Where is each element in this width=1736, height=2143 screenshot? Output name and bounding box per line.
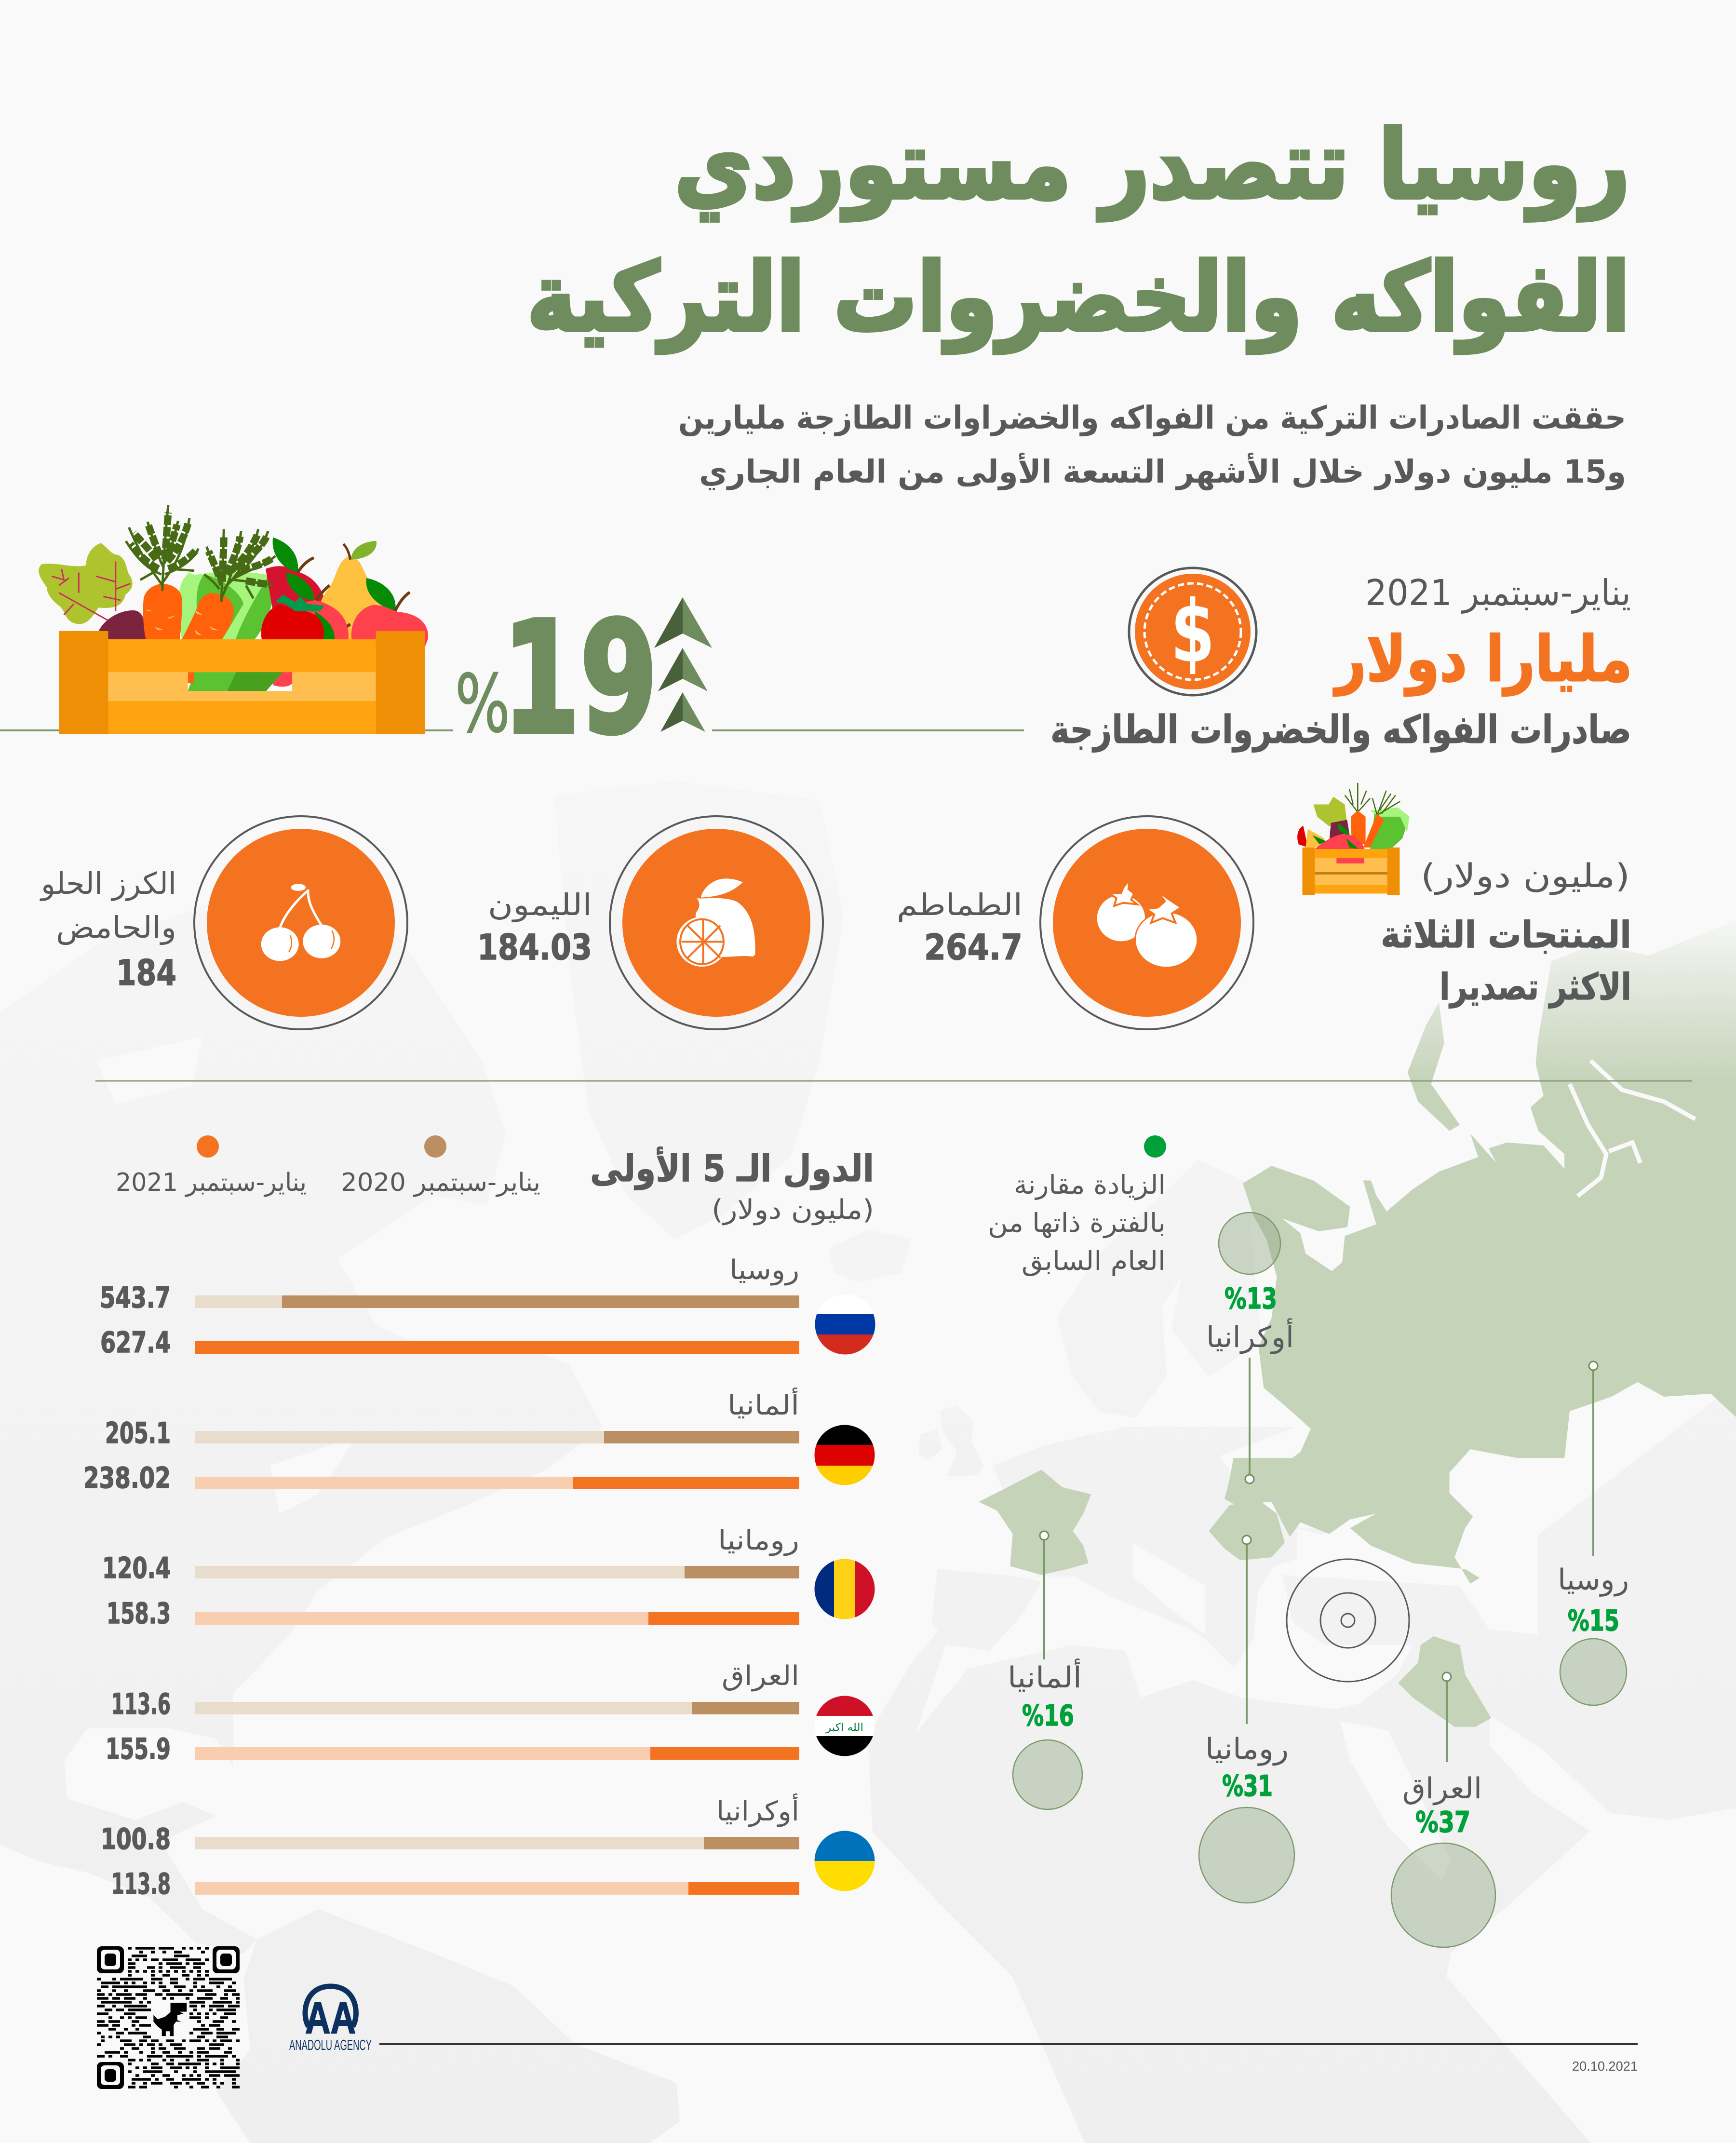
subtitle: و15 مليون دولار خلال الأشهر التسعة الأولى من العام الجاري [699,452,1626,491]
bar row: Romania: رومانيا [718,1525,799,1556]
Novaya Zemlya [1408,1002,1460,1131]
heading: top five countries [590,1146,874,1226]
product: cherries: الكرز الحلو [40,866,176,901]
icon: cherries [194,816,407,1029]
title [527,110,1630,354]
icon: dollar coin: $ [1171,582,1215,682]
crate slat [108,672,376,701]
product: lemon: 184.03 [477,927,592,968]
bar row: Germany: ألمانيا [727,1388,799,1421]
map marker: Germany [1008,1531,1082,1809]
bar row: Russia [100,1254,875,1360]
legend: periods [116,1135,540,1197]
bar row: Ukraine: 113.8 [111,1867,171,1901]
flag: Iraq [814,1696,875,1756]
world map background [0,781,1736,2143]
logo: Anadolu Agency: AA [305,1994,356,2043]
heading: top five countries: (مليون دولار) [712,1194,874,1226]
bar row: Germany [83,1388,875,1495]
Russia [1243,920,1736,1584]
icon: lemon [610,816,823,1029]
green leaves [273,538,396,611]
legend: periods: يناير-سبتمبر 2021 [116,1168,307,1197]
map marker: Ukraine: أوكرانيا [1206,1318,1294,1354]
total exports block: مليارا دولار [1333,622,1632,696]
mid apple [295,600,349,641]
QR modules [97,1948,240,2087]
map marker: Romania: رومانيا [1205,1732,1289,1766]
logo: Anadolu Agency: ANADOLU AGENCY [289,2036,372,2053]
product: lemon: الليمون [488,887,592,922]
map marker: Russia [1558,1361,1629,1705]
bar row: Russia: 543.7 [100,1281,171,1315]
product: lemon [477,816,823,1029]
back red apple [266,566,330,641]
map marker: Russia: %15 [1568,1604,1619,1638]
title: روسيا تتصدر مستوردي [674,110,1630,221]
pear [315,556,389,641]
beet [98,610,146,641]
carrot greens [126,505,275,602]
QR code [97,1946,240,2089]
product: cherries [40,816,407,1029]
bar row: Iraq: 113.6 [111,1687,171,1721]
QR dinosaur [153,2003,187,2036]
footer line [379,2043,1638,2045]
date: 20.10.2021 [1572,2059,1638,2074]
map marker: Germany: %16 [1022,1699,1074,1733]
section divider [95,1080,1692,1082]
heading: top three products: الاكثر تصديرا [1440,965,1631,1009]
product: tomato: 264.7 [924,927,1023,968]
bar row: Romania: 158.3 [107,1597,171,1631]
chard leaves [39,543,133,624]
Russia river gulfs [1570,1061,1695,1196]
crate body [108,639,376,734]
icon: small vegetable crate [1297,783,1410,895]
bar row: Ukraine [101,1793,875,1901]
flag: Ukraine [814,1831,875,1891]
icon: rising arrows [654,597,712,732]
map marker: Ukraine [1206,1213,1294,1483]
crate window [188,672,292,691]
Romania [1209,1502,1285,1560]
map marker: Germany: ألمانيا [1008,1658,1082,1695]
subtitle: حققت الصادرات التركية من الفواكه والخضراوات الطازجة مليارين [678,399,1626,437]
total exports block: يناير-سبتمبر 2021 [1365,572,1631,614]
France [979,1469,1091,1575]
growth figure: %19: 19 [502,589,658,768]
total exports block: صادرات الفواكه والخضروات الطازجة [1050,707,1631,753]
product: tomato [897,816,1253,1029]
carrot 1 [143,583,182,641]
logo: Anadolu Agency [289,1986,372,2053]
icon: tomato [1040,816,1253,1029]
legend: increase note [988,1135,1166,1277]
map marker: Romania [1199,1536,1294,1903]
product: cherries: 184 [116,953,176,994]
legend: periods: يناير-سبتمبر 2020 [341,1168,540,1197]
flag: Germany [814,1425,875,1486]
heading: top five countries: الدول الـ 5 الأولى [590,1146,874,1190]
red pepper [315,611,335,641]
bar row: Iraq: 155.9 [106,1732,171,1766]
front apple [351,605,428,652]
map marker: Ukraine: %13 [1225,1282,1277,1316]
flag: Russia [815,1314,875,1355]
product: cherries: والحامض [56,910,176,945]
bar row: Russia: روسيا [729,1254,799,1286]
heading: top three products: المنتجات الثلاثة [1381,913,1631,956]
illustration: crate of vegetables [39,505,428,734]
map marker: Russia: روسيا [1558,1563,1629,1597]
bar row: Iraq [108,1664,875,1760]
bar row: Germany: 238.02 [83,1461,171,1495]
growth figure: %19: % [455,658,510,750]
QR finder patterns [97,1946,240,2089]
legend: increase note: بالفترة ذاتها من [988,1208,1166,1238]
bar row: Russia: 627.4 [100,1326,171,1360]
subtitle [678,399,1626,491]
total exports block [1050,572,1632,753]
bar row: Ukraine: أوكرانيا [716,1793,799,1827]
map marker: Iraq: %37 [1415,1806,1470,1839]
legend: increase note: العام السابق [1022,1246,1166,1277]
growth figure: %19 [455,589,658,768]
heading: top three products: (مليون دولار) [1421,857,1630,895]
map: highlighted countries [979,920,1736,1727]
Ukraine [1225,1446,1386,1537]
bar row: Iraq: العراق [722,1660,799,1692]
bar row: Romania [102,1525,875,1631]
bar row: Romania: 120.4 [102,1551,171,1585]
map marker: Iraq: العراق [1402,1772,1482,1806]
flag: Romania [814,1559,875,1619]
map marker: Iraq [1391,1672,1495,1947]
flag: Iraq: الله اكبر [825,1722,863,1734]
Iraq [1398,1636,1491,1727]
bar row: Germany: 205.1 [105,1416,171,1450]
map marker: Turkey rings [1287,1559,1409,1682]
map marker: Romania: %31 [1222,1769,1273,1803]
heading: top three products [1381,857,1631,1009]
bar row: Ukraine: 100.8 [101,1822,171,1856]
product: tomato: الطماطم [897,887,1023,922]
carrot 2 [181,593,234,641]
legend: increase note: الزيادة مقارنة [1014,1170,1166,1200]
map: seas and channels [96,795,1736,2143]
lettuce [178,572,278,641]
crate posts [59,631,108,734]
icon: dollar coin [1129,568,1256,695]
divider line under hero [0,729,1024,731]
